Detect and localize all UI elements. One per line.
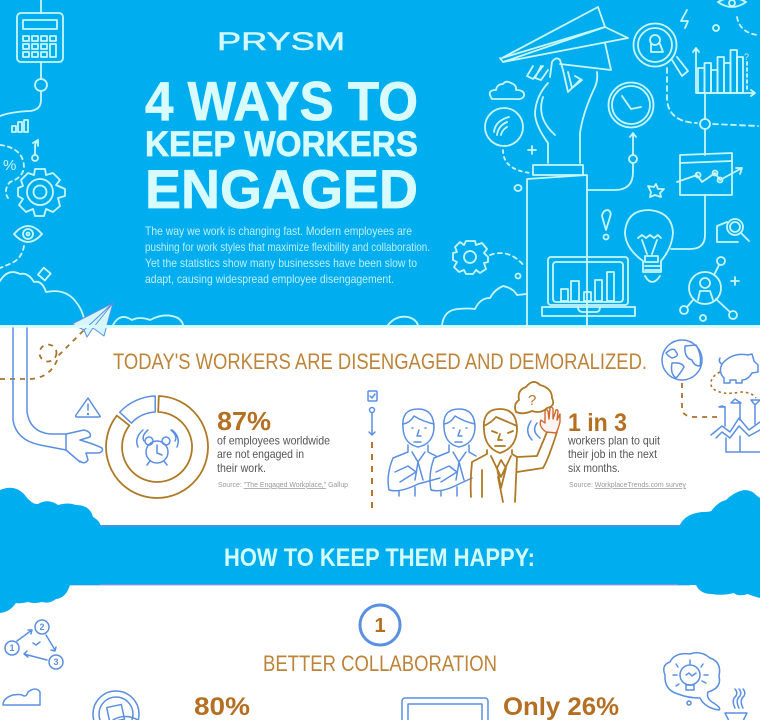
icon: network person — [680, 257, 739, 321]
icon: top eye — [718, 0, 758, 35]
icon: monitor — [402, 698, 488, 720]
title — [145, 70, 418, 220]
icon: paper plane in hand — [500, 7, 628, 70]
icon: numbered cycle — [5, 620, 63, 669]
stat: 1 in 3: six months. — [568, 461, 620, 475]
donut chart: 87% — [106, 396, 208, 498]
icon: rising chart with arrows — [711, 399, 760, 452]
icon: piggy bank — [719, 354, 758, 383]
icon: alarm clock — [137, 430, 178, 465]
icon: gear — [18, 169, 65, 216]
icon: magnifier with person — [634, 24, 697, 123]
icon: plus and small circles — [514, 25, 719, 278]
icon: percent with dashed arc: % — [3, 157, 16, 174]
intro text block: pushing for work styles that maximize flexibility and collaboration. — [145, 240, 430, 254]
panel: banner how to keep them happy — [0, 525, 760, 586]
icon: thought cloud with question: ? — [528, 392, 536, 409]
illustration: first blue worker — [388, 409, 440, 496]
icon: raised hand — [540, 407, 560, 433]
title: ENGAGED — [145, 158, 418, 220]
stat: 1 in 3: workers plan to quit — [567, 434, 661, 448]
icon: star — [648, 184, 664, 197]
illustration: orange worker raising hand — [471, 409, 557, 502]
icon: exclamation — [602, 210, 611, 240]
illustration: pointing arm — [13, 328, 102, 463]
icon: light bulb — [625, 210, 673, 282]
icon: waving lines — [528, 421, 540, 440]
logo: Prysm: PRYSM — [217, 28, 345, 56]
icon: dashed path and node — [0, 330, 84, 379]
stat: 1 in 3: 1 in 3 — [568, 409, 627, 437]
stat: 87% — [217, 406, 348, 489]
stat: 87%: their work. — [217, 461, 266, 475]
stat: 87%: are not engaged in — [217, 447, 304, 461]
stat: 87%: of employees worldwide — [217, 434, 330, 448]
icon: target with square — [93, 691, 139, 720]
icon: lightning bolt — [681, 10, 688, 28]
stat: 87%: Source: "The Engaged Workplace," Gallup — [218, 480, 348, 489]
intro text block: Yet the statistics show many businesses have been slow to — [145, 256, 417, 270]
icon: calculator — [0, 0, 63, 116]
panel: banner how to keep them happy: HOW TO KEEP THEM HAPPY: — [224, 544, 535, 572]
stat: 1 in 3: their job in the next — [568, 447, 658, 461]
step number circle: 1 — [374, 615, 386, 637]
icon: left clouds — [0, 268, 418, 325]
icon: clock — [587, 82, 654, 190]
icon: globe — [662, 340, 702, 380]
icon: thought bubble with bulb — [664, 653, 720, 710]
icon: chart question mark: ? — [744, 52, 749, 62]
stat: 87%: 87% — [217, 406, 271, 436]
icon: small cloud — [3, 689, 40, 705]
title: KEEP WORKERS — [145, 125, 418, 164]
icon: eye — [0, 226, 42, 268]
icon: steaming cup — [725, 689, 747, 720]
icon: folder and magnifier — [717, 219, 749, 242]
icon: dotted path from piggy — [711, 372, 756, 398]
cloud: left — [0, 488, 101, 613]
icon: up arrow with node — [32, 140, 38, 161]
step number circle — [360, 605, 400, 645]
icon: wifi circle — [485, 108, 531, 173]
label: cycle number one: 1 — [9, 643, 15, 653]
heading: disengaged: TODAY'S WORKERS ARE DISENGAGED AND DEMORALIZED. — [113, 349, 647, 374]
divider with checkbox — [368, 391, 377, 512]
icon: small bars — [12, 120, 28, 132]
icon: thought cloud with question — [515, 382, 553, 413]
icon: trend window — [671, 153, 742, 249]
strip below hero — [0, 325, 760, 328]
label: cycle number three: 3 — [53, 657, 59, 667]
bar chart icon — [693, 48, 758, 155]
intro text block — [145, 224, 430, 286]
intro text block: adapt, causing widespread employee disengagement. — [145, 272, 394, 286]
icon: percent with dashed arc — [0, 145, 24, 198]
title: 4 WAYS TO — [145, 70, 418, 132]
illustration: hand and sleeve — [527, 58, 597, 325]
icon: laptop with chart — [542, 257, 635, 325]
stat: 1 in 3: Source: WorkplaceTrends.com survey — [569, 480, 686, 489]
icon: cloud — [490, 82, 524, 99]
label: cycle number two: 2 — [39, 622, 45, 632]
panel: hero background — [0, 0, 760, 325]
stat: 1 in 3 — [567, 409, 686, 489]
cloud: right — [678, 490, 760, 598]
icon: paper plane on hero — [72, 303, 113, 337]
icon: gear lower — [453, 241, 525, 274]
illustration: second blue worker — [430, 409, 476, 496]
icon: warning triangle — [76, 398, 100, 417]
heading: better collaboration: BETTER COLLABORATION — [263, 651, 497, 676]
icon: dashed link from globe — [682, 383, 722, 417]
intro text block: The way we work is changing fast. Modern employees are — [145, 224, 412, 238]
icon: lower cloud — [442, 286, 527, 325]
